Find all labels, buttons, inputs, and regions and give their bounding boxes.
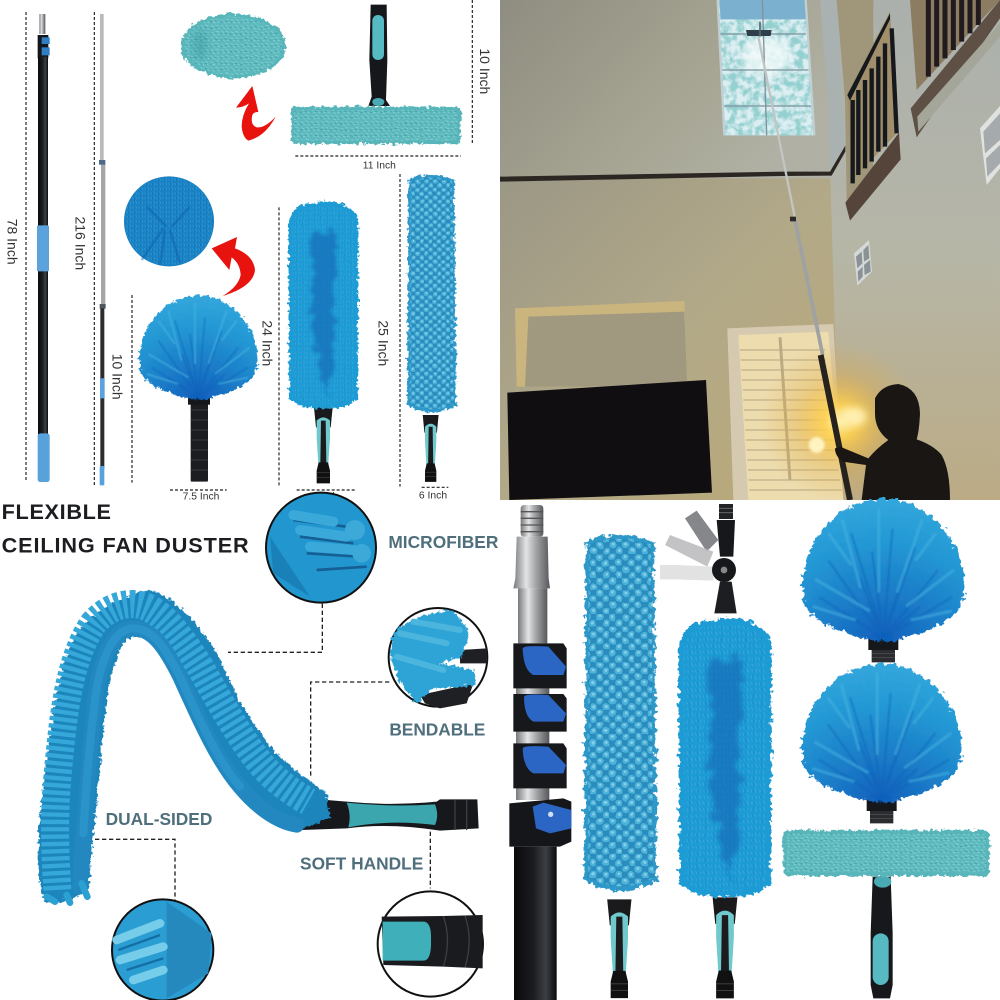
icon: window washer pad <box>291 5 461 144</box>
callout: soft handle closeup <box>378 891 483 997</box>
person silhouette <box>835 384 950 500</box>
pole labels: 78 Inch <box>4 219 20 265</box>
wall surfaces <box>500 0 1000 500</box>
pole labels: 24 Inch <box>259 320 275 366</box>
pole labels: 11 Inch <box>363 161 396 172</box>
short pole <box>37 14 50 482</box>
pole labels: 6 Inch <box>310 492 338 503</box>
pole labels: 6 Inch <box>419 490 447 501</box>
extended telescopic pole <box>746 22 850 500</box>
label: dual-sided: DUAL-SIDED <box>106 809 212 829</box>
title: FLEXIBLE <box>2 499 111 524</box>
arrow: red arrow to pad <box>236 86 276 141</box>
duster handle <box>302 799 479 831</box>
wall vents <box>854 106 1000 286</box>
callout: bendable closeup <box>389 608 487 708</box>
picture rail <box>500 146 845 182</box>
icon: cobweb duster top <box>802 499 964 662</box>
panel: flexible ceiling fan duster <box>2 493 499 1000</box>
icon: chenille duster <box>407 174 456 482</box>
bendable duster <box>38 590 330 903</box>
callout: microfiber closeup <box>266 493 376 603</box>
icon: teal pad closeup <box>181 14 286 78</box>
icon: flat duster large <box>678 618 772 998</box>
panel: assembled kit of pole and heads <box>509 499 989 1000</box>
arrow: red arrow to fibre closeup <box>212 237 255 296</box>
pole labels <box>4 48 493 503</box>
wall niche <box>515 301 687 387</box>
label: soft handle: SOFT HANDLE <box>300 853 423 873</box>
pole labels: 216 Inch <box>72 217 88 270</box>
pole labels: 7.5 Inch <box>183 492 220 503</box>
panel: dimensions of pole and attachments <box>4 0 493 503</box>
upper balconies <box>845 0 1000 221</box>
shuttered door <box>727 324 843 500</box>
long pole <box>99 14 106 485</box>
icon: cobweb duster lower <box>802 664 961 823</box>
icon: blue fibre closeup <box>124 176 214 266</box>
high window <box>718 0 814 135</box>
telescopic pole with clamps <box>509 505 571 1000</box>
icon: swivel adapter with ghosted positions <box>660 504 737 613</box>
pole labels: 10 Inch <box>110 354 126 400</box>
title <box>2 499 249 558</box>
icon: cobweb duster <box>139 296 257 482</box>
icon: flat duster <box>288 202 358 483</box>
pole labels: 25 Inch <box>375 320 391 366</box>
label: bendable: BENDABLE <box>389 719 485 739</box>
pole labels: 10 Inch <box>477 48 493 94</box>
panel: photo of person cleaning a high window <box>500 0 1000 502</box>
television <box>507 380 712 500</box>
icon: chenille duster large <box>584 534 657 998</box>
title: CEILING FAN DUSTER <box>2 533 249 558</box>
callout: dual-sided closeup <box>112 899 213 1000</box>
lamp glow <box>768 349 900 494</box>
callout connector lines <box>95 597 430 900</box>
label: microfiber: MICROFIBER <box>388 532 499 552</box>
dimension dashed lines <box>26 0 472 490</box>
icon: window washer head <box>783 830 989 998</box>
